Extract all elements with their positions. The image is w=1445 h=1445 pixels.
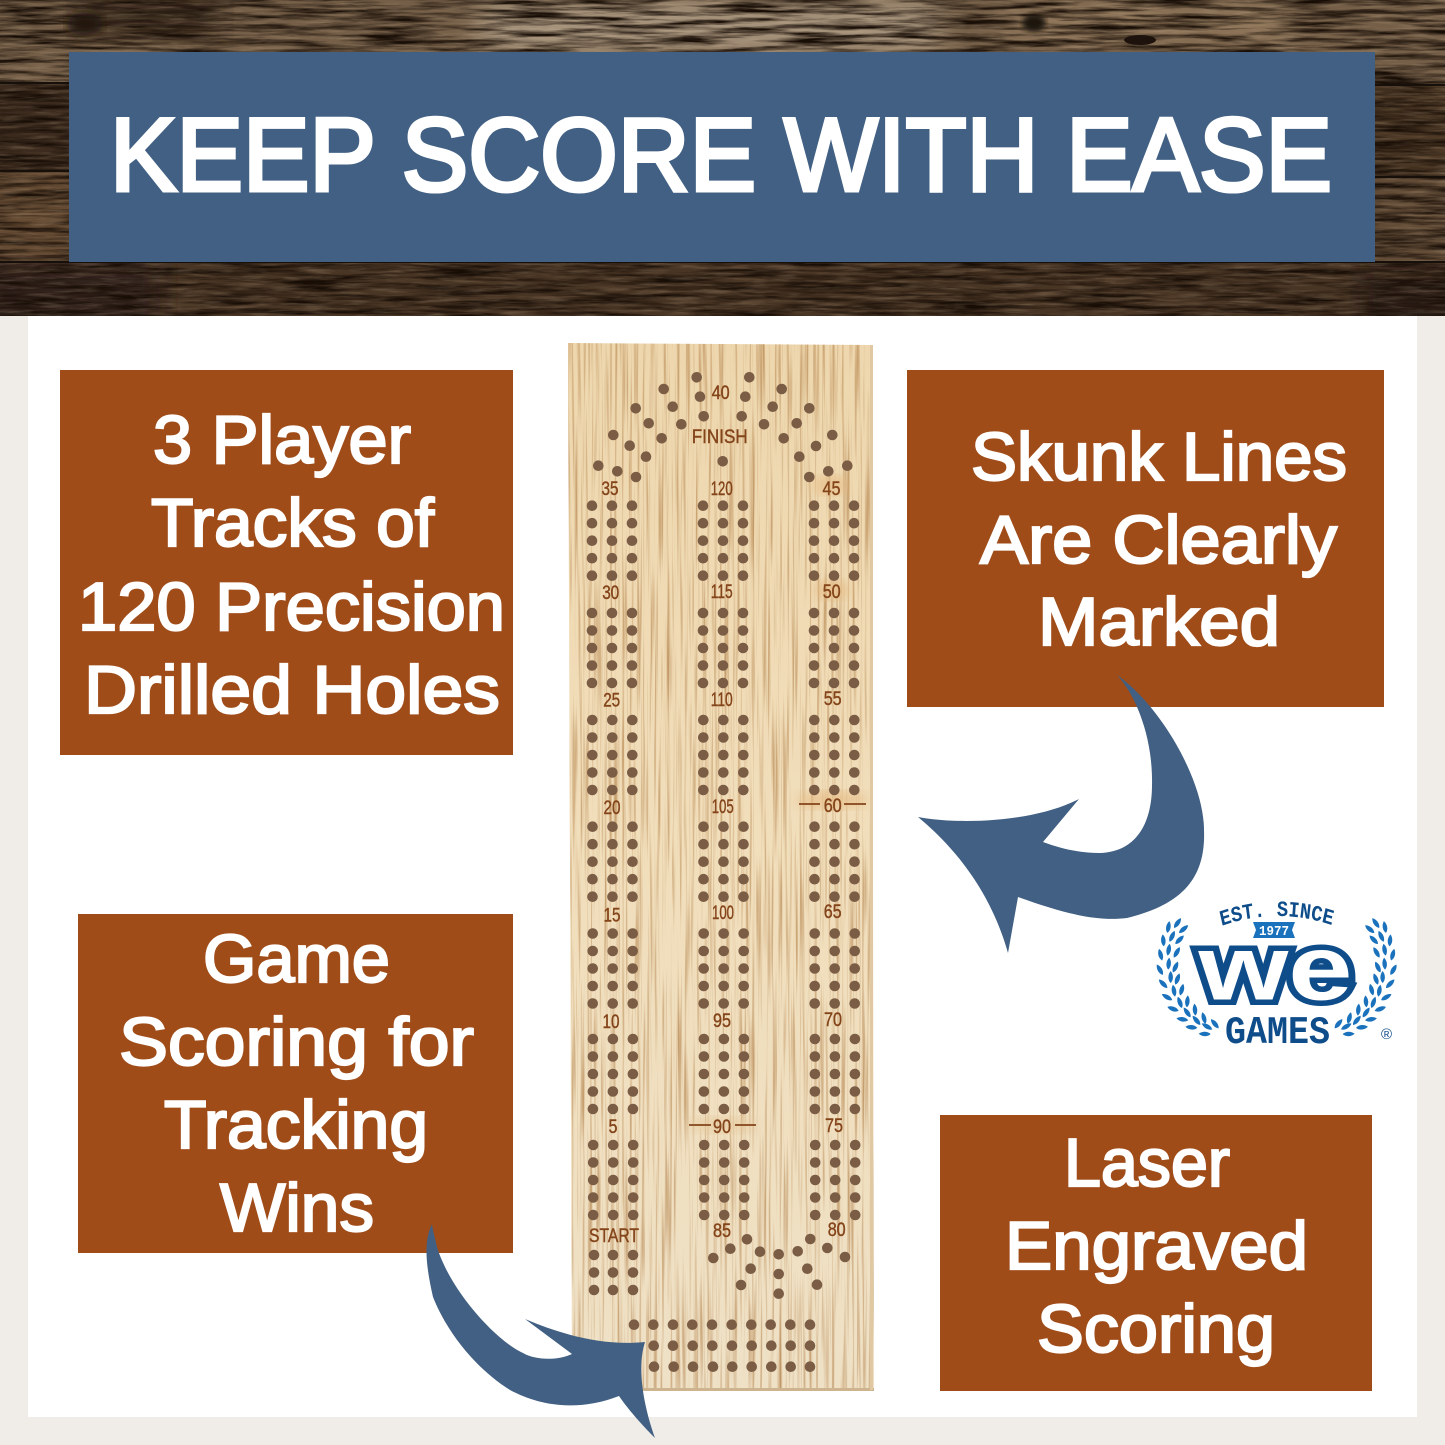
title text: KEEP SCORE WITH EASE: [110, 98, 1332, 214]
laurel left: [1155, 917, 1220, 1036]
logo: WE Games: [1156, 901, 1397, 1055]
engraved numbers: 35: [602, 479, 618, 500]
text: game scoring: Scoring for: [119, 1004, 474, 1080]
engraved numbers: [589, 383, 846, 1247]
engraved numbers: 90: [713, 1117, 731, 1138]
text: game scoring: Game: [203, 921, 390, 997]
start holes: [594, 1255, 633, 1290]
panel: skunk lines: [907, 370, 1384, 707]
text: skunk lines: [971, 419, 1347, 660]
skunk line at 60: [799, 803, 866, 805]
panel: 3 player tracks: [60, 370, 513, 755]
engraved numbers: 40: [712, 383, 730, 404]
text: 3 player tracks: Drilled Holes: [84, 652, 500, 728]
text: game scoring: Tracking: [164, 1087, 428, 1163]
engraved numbers: 30: [602, 583, 619, 604]
engraved numbers: 55: [824, 689, 842, 710]
engraved numbers: 105: [712, 797, 734, 818]
engraved numbers: 20: [604, 798, 620, 819]
finish row holes: [634, 1325, 810, 1367]
page background frame: [0, 316, 1445, 1445]
text: 3 player tracks: 3 Player: [153, 402, 411, 478]
engraved numbers: 120: [711, 479, 733, 500]
logo games wordmark: GAMES: [1225, 1011, 1330, 1055]
text: 3 player tracks: [78, 402, 505, 728]
text: laser engraved: [1005, 1125, 1308, 1367]
engraved numbers: 80: [828, 1220, 846, 1241]
cribbage board: [560, 340, 880, 1395]
text: skunk lines: Are Clearly: [980, 502, 1337, 578]
text: game scoring: [119, 921, 474, 1246]
logo arc text: EST. SINCE: [1220, 901, 1334, 926]
panel: game scoring: [78, 914, 513, 1253]
text: laser engraved: Laser: [1064, 1125, 1230, 1201]
arrow: skunk lines to board: [918, 675, 1204, 953]
arrow: game scoring to board: [426, 1224, 655, 1438]
text: skunk lines: Marked: [1038, 584, 1280, 660]
laurel right: [1333, 917, 1398, 1036]
text: skunk lines: Skunk Lines: [971, 419, 1347, 495]
scoring hole blocks: [592, 506, 855, 1215]
title banner: [69, 52, 1375, 262]
engraved numbers: 110: [711, 690, 733, 711]
engraved numbers: 5: [608, 1117, 618, 1138]
engraved numbers: FINISH: [692, 427, 748, 448]
text: laser engraved: Engraved: [1005, 1208, 1308, 1284]
skunk line at 90: [689, 1124, 756, 1126]
top arc holes: [598, 377, 847, 477]
engraved numbers: 85: [713, 1221, 731, 1242]
engraved numbers: 15: [604, 906, 620, 927]
engraved numbers: 100: [712, 903, 734, 924]
text: 3 player tracks: 120 Precision: [78, 569, 505, 645]
logo arc text: [1220, 901, 1334, 926]
wood plank header background: [0, 0, 1445, 332]
panel: laser engraved: [940, 1115, 1372, 1391]
bottom arc holes: [713, 1239, 845, 1294]
engraved numbers: 25: [603, 691, 620, 712]
engraved numbers: 60: [824, 796, 842, 817]
engraved numbers: 50: [823, 582, 841, 603]
text: 3 player tracks: Tracks of: [151, 485, 434, 561]
logo we wordmark: we: [1197, 918, 1352, 1020]
engraved numbers: 65: [824, 902, 842, 923]
engraved numbers: START: [589, 1226, 639, 1247]
logo registered mark: ®: [1381, 1026, 1392, 1043]
text: laser engraved: Scoring: [1037, 1291, 1275, 1367]
text: game scoring: Wins: [220, 1170, 374, 1246]
engraved numbers: 45: [822, 479, 840, 500]
engraved numbers: 95: [713, 1011, 731, 1032]
logo year ribbon: 1977: [1259, 924, 1289, 940]
engraved numbers: 70: [824, 1010, 842, 1031]
engraved numbers: 10: [602, 1012, 620, 1033]
engraved numbers: 75: [825, 1116, 843, 1137]
engraved numbers: 115: [711, 582, 733, 603]
